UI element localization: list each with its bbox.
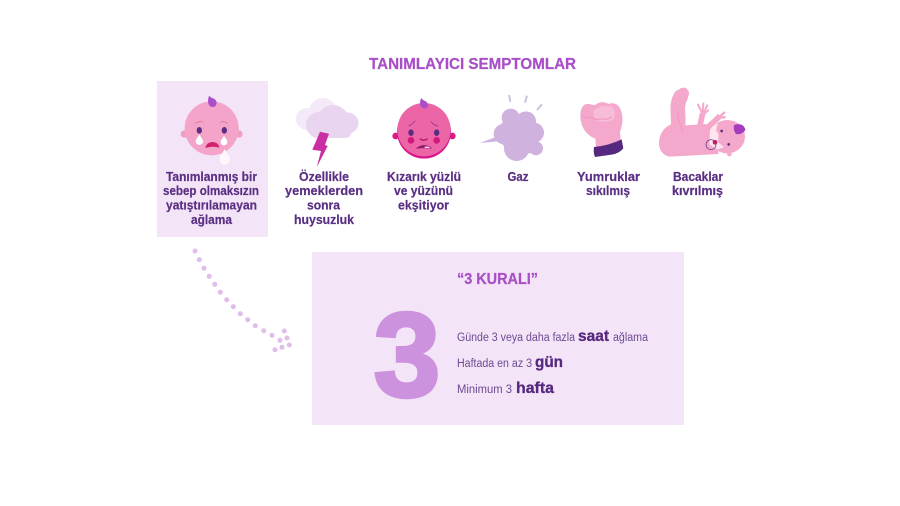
- rule line: days: Haftada en az 3: [457, 358, 532, 370]
- label: fussiness: yemeklerden: [285, 184, 363, 198]
- rule line: weeks: Minimum 3: [457, 384, 512, 396]
- icon: flushed baby: [392, 98, 456, 159]
- label: legs: kıvrılmış: [672, 184, 723, 198]
- rule line: hours: Günde 3 veya daha fazla: [457, 332, 576, 344]
- rule line: hours: ağlama: [613, 332, 649, 344]
- label: gas: Gaz: [508, 170, 528, 184]
- icon: curled baby: [659, 88, 745, 157]
- label: fists: Yumruklar: [577, 170, 640, 184]
- label: fists: sıkılmış: [586, 184, 630, 198]
- label: fussiness: huysuzluk: [294, 213, 354, 227]
- panel: inconsolable crying symptom: [157, 81, 268, 237]
- symptom: flushed grimacing face: [387, 98, 461, 212]
- label: crying: ağlama: [191, 213, 233, 227]
- rule line: hours: saat: [578, 328, 610, 345]
- rule line: weeks: hafta: [516, 380, 554, 397]
- label: crying: sebep olmaksızın: [163, 184, 259, 198]
- symptom: curled legs: [659, 88, 745, 198]
- symptom: clenched fists: [577, 102, 640, 198]
- icon: clenched fist: [580, 102, 623, 157]
- label: legs: Bacaklar: [673, 170, 723, 184]
- label: flushed face: ekşitiyor: [398, 198, 449, 212]
- label: flushed face: Kızarık yüzlü: [387, 170, 461, 184]
- big number 3: 3: [374, 288, 440, 422]
- label: flushed face: ve yüzünü: [394, 184, 453, 198]
- icon: storm cloud: [296, 98, 358, 167]
- arrow: dotted arrow: [192, 248, 292, 352]
- panel: rule of three: [312, 252, 684, 425]
- label: crying: Tanımlanmış bir: [166, 170, 257, 184]
- icon: crying baby: [181, 96, 243, 165]
- label: fussiness: sonra: [307, 198, 341, 212]
- symptom: gas: [480, 95, 544, 184]
- label: fussiness: Özellikle: [299, 169, 349, 184]
- rule line: days: gün: [535, 354, 563, 371]
- heading: rule of three: “3 KURALI”: [457, 271, 538, 288]
- title: TANIMLAYICI SEMPTOMLAR: [369, 56, 576, 73]
- symptom: fussiness after meals: [285, 98, 363, 227]
- icon: gas cloud: [480, 95, 544, 161]
- label: crying: yatıştırılamayan: [166, 198, 257, 212]
